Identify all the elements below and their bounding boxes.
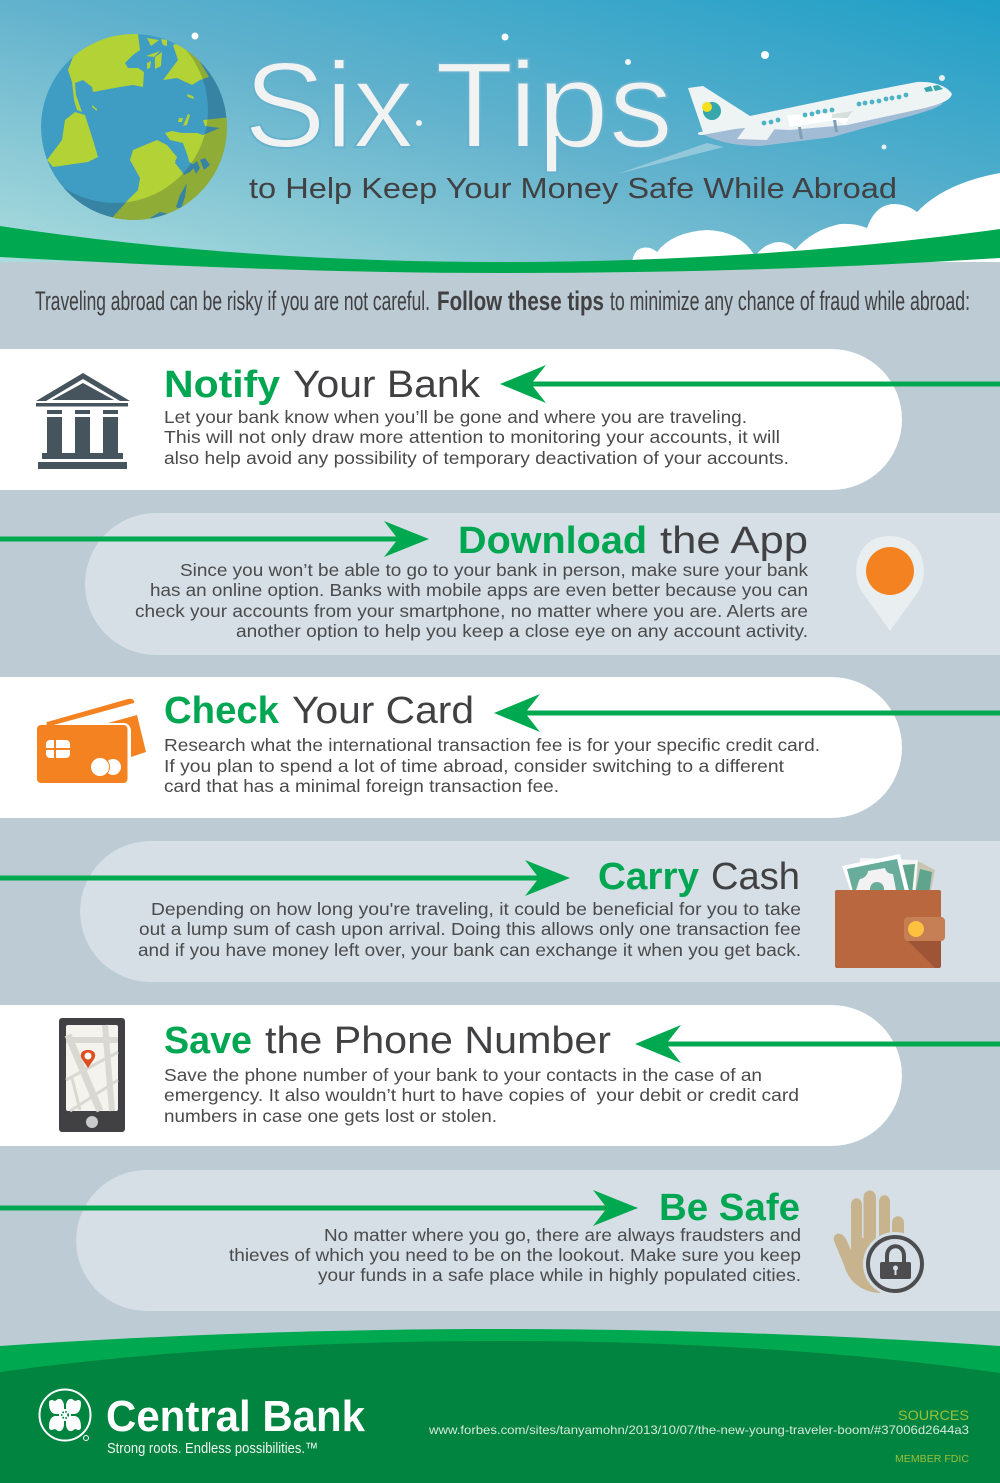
icon: map pin: [856, 536, 924, 631]
text: Save the Phone Number: Save the phone number of your bank to your contacts in the case of an: [164, 1065, 762, 1085]
text: Carry Cash: and if you have money left over, your bank can exchange it when you get back.: [138, 940, 801, 960]
arrow: [0, 521, 429, 557]
sources: SOURCES: [898, 1407, 969, 1423]
sources: MEMBER FDIC: [895, 1453, 969, 1465]
text: Carry Cash: [138, 899, 801, 960]
heading: Carry Cash: [598, 856, 800, 898]
intro text: [35, 286, 970, 316]
title: Six Tips: Tips: [435, 37, 673, 173]
panel: Notify Your Bank: [0, 349, 1000, 490]
text: Download the App: check your accounts from your smartphone, no matter where you are. Alerts are: [135, 601, 808, 621]
arrow: [494, 694, 1000, 732]
subtitle: to Help Keep Your Money Safe While Abroad: [249, 173, 897, 205]
panel: Carry Cash: [0, 841, 1000, 982]
panel: Be Safe: [0, 1170, 1000, 1311]
logo: Central Bank wordmark: Central Bank: [106, 1392, 365, 1441]
text: Carry Cash: Depending on how long you're traveling, it could be beneficial for you to take: [151, 899, 801, 919]
text: Be Safe: No matter where you go, there are always fraudsters and: [324, 1225, 801, 1245]
panel: Download the App: [0, 513, 1000, 655]
heading: Check Your Card: Your Card: [292, 690, 474, 732]
text: Download the App: has an online option. Banks with mobile apps are even better because you can: [150, 580, 808, 600]
arrow: [500, 365, 1000, 403]
panel: Save the Phone Number: [0, 1005, 1000, 1146]
title: Six Tips: [244, 37, 673, 173]
icon: bank building: [36, 373, 130, 469]
text: Notify Your Bank: [164, 407, 789, 468]
text: Download the App: Since you won’t be able to go to your bank in person, make sure your bank: [180, 560, 808, 580]
text: Save the Phone Number: [164, 1065, 799, 1126]
heading: Be Safe: Be Safe: [659, 1187, 800, 1229]
text: Be Safe: thieves of which you need to be on the lookout. Make sure you keep: [229, 1245, 801, 1265]
text: Check Your Card: [164, 735, 820, 796]
text: Be Safe: your funds in a safe place while in highly populated cities.: [318, 1265, 801, 1285]
text: Save the Phone Number: numbers in case one gets lost or stolen.: [164, 1106, 497, 1126]
sources: www.forbes.com/sites/tanyamohn/2013/10/07/the-new-young-traveler-boom/#37006d2644a3: [428, 1423, 969, 1437]
green swoosh header: [0, 226, 1000, 273]
text: Check Your Card: card that has a minimal foreign transaction fee.: [164, 776, 559, 796]
text: Carry Cash: out a lump sum of cash upon arrival. Doing this allows only one transaction fee: [139, 919, 801, 939]
header sky: [0, 0, 1000, 262]
icon: wallet: [835, 854, 945, 968]
heading: Check Your Card: Check: [164, 690, 280, 732]
icon: globe: [41, 34, 227, 220]
tagline: Strong roots. Endless possibilities.™: [107, 1440, 318, 1457]
text: Save the Phone Number: emergency. It also wouldn’t hurt to have copies of your debit or credit card: [164, 1085, 799, 1105]
heading: Notify Your Bank: [164, 364, 481, 406]
text: Notify Your Bank: also help avoid any possibility of temporary deactivation of your accounts.: [164, 448, 789, 468]
heading: Download the App: Download: [458, 520, 647, 562]
icon: credit cards: [37, 699, 146, 783]
heading: Save the Phone Number: Save: [164, 1020, 252, 1062]
heading: Save the Phone Number: the Phone Number: [265, 1020, 611, 1062]
heading: Notify Your Bank: Notify: [164, 364, 280, 406]
clouds: [632, 173, 1000, 262]
icon: airplane: [617, 82, 952, 174]
text: Notify Your Bank: This will not only draw more attention to monitoring your accounts, it will: [164, 427, 780, 447]
heading: Download the App: [458, 520, 808, 562]
text: Notify Your Bank: Let your bank know when you’ll be gone and where you are traveling.: [164, 407, 747, 427]
text: Check Your Card: Research what the international transaction fee is for your specific credit card.: [164, 735, 820, 755]
arrow: [0, 1190, 638, 1226]
icon: smartphone with map: [59, 1018, 125, 1132]
text: Be Safe: [229, 1225, 801, 1285]
sources: [428, 1407, 969, 1465]
heading: Download the App: the App: [660, 520, 808, 562]
intro text: Follow these tips: [437, 286, 604, 316]
logo: clover emblem: [40, 1390, 90, 1440]
arrow: [0, 860, 570, 896]
heading: Notify Your Bank: Your Bank: [293, 364, 481, 406]
heading: Check Your Card: [164, 690, 474, 732]
text: Download the App: [135, 560, 808, 641]
intro text: Traveling abroad can be risky if you are not careful.: [35, 286, 430, 316]
heading: Carry Cash: Cash: [711, 856, 800, 898]
panel: Check Your Card: [0, 677, 1000, 818]
footer: [0, 1329, 1000, 1483]
icon: hand with padlock: [834, 1190, 927, 1296]
heading: Carry Cash: Carry: [598, 856, 699, 898]
title: Six Tips: Six: [244, 37, 414, 173]
text: Check Your Card: If you plan to spend a lot of time abroad, consider switching to a different: [164, 756, 784, 776]
text: Download the App: another option to help you keep a close eye on any account activity.: [236, 621, 808, 641]
arrow: [635, 1025, 1000, 1063]
